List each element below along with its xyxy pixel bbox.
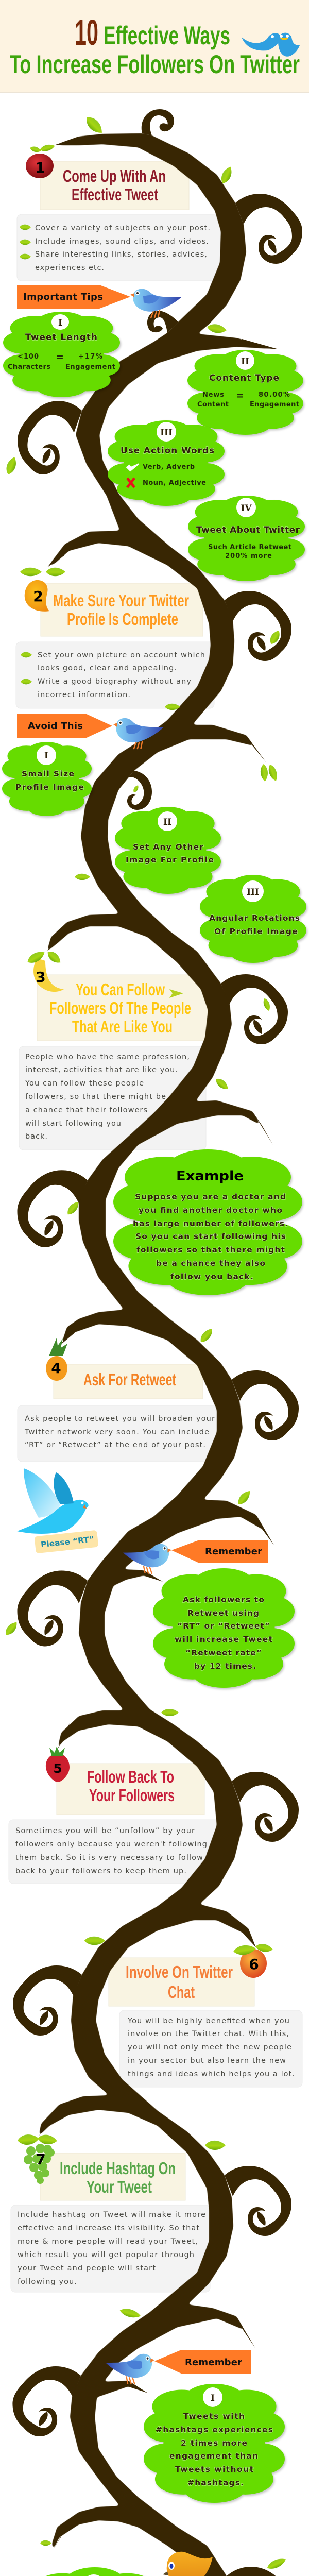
panel: step 1 text: Share interesting links, stories, advices,: [35, 250, 207, 259]
cloud: remember retweet: Ask followers to: [183, 1595, 264, 1604]
arrow: avoid this: Avoid This: [28, 721, 83, 732]
panel: step 3 heading box: Followers Of The People: [49, 998, 191, 1018]
icon: banana fruit 3: 3: [36, 969, 46, 986]
cloud: set any other image: Set Any Other: [133, 842, 203, 852]
cloud: angular rotations: Of Profile Image: [214, 927, 298, 936]
panel: step 5 text: Sometimes you will be “unfollow” by your: [15, 1827, 195, 1835]
cloud: remember retweet: “Retweet rate”: [185, 1648, 262, 1657]
panel: step 1 text: [17, 214, 223, 281]
arrow: important tips: Important Tips: [23, 292, 103, 302]
icon: apple fruit 1: 1: [35, 159, 45, 176]
cloud: remember retweet: “RT” or “Retweet”: [177, 1621, 270, 1631]
cloud: tweet length: +17%: [78, 353, 102, 361]
panel: step 6 text: in your sector but also learn the new: [128, 2057, 286, 2065]
icon: mango fruit 2: 2: [33, 588, 43, 605]
panel: step 3 text: followers, so that there might be: [25, 1093, 166, 1101]
cloud: small size profile image: Profile Image: [15, 783, 84, 792]
cloud: set any other image: [115, 807, 221, 894]
cloud: tweet about twitter: Such Article Retweet: [208, 544, 291, 551]
cloud: tweet about twitter: [188, 496, 305, 581]
icon: peach fruit 6: [233, 1943, 273, 1978]
cloud: example: Example: [176, 1168, 244, 1184]
panel: step 6 text: you will not only meet the new people: [128, 2043, 291, 2052]
panel: step 3 heading box: You Can Follow: [76, 980, 165, 999]
panel: step 3 text: People who have the same profession,: [25, 1053, 190, 1061]
arrow: avoid this: [17, 714, 112, 738]
cloud: tweet length: Engagement: [65, 363, 115, 371]
icon: peach fruit 6: 6: [249, 1956, 259, 1973]
cloud: content type: Engagement: [250, 401, 299, 409]
icon: grapes fruit 7: 7: [36, 2151, 46, 2168]
icon: mango fruit 2: [20, 568, 65, 612]
panel: step 7 heading box: [40, 2153, 185, 2200]
panel: step 5 heading box: Follow Back To: [87, 1767, 174, 1786]
cloud: small size profile image: I: [44, 751, 48, 761]
panel: step 3 text: You can follow these people: [25, 1079, 144, 1088]
panel: step 3 text: a chance that their followers: [25, 1106, 147, 1114]
cloud: hashtag engagement: engagement than: [169, 2451, 258, 2461]
icon: blue bird remember hashtag: [106, 2354, 154, 2384]
header banner: 10: [75, 12, 98, 53]
panel: step 1 heading box: Effective Tweet: [72, 185, 158, 204]
icon: orange bird on trunk: [163, 2552, 213, 2576]
panel: step 5 text: [9, 1820, 220, 1884]
panel: step 7 heading box: Your Tweet: [87, 2177, 152, 2196]
cloud: tweet about twitter: 200% more: [225, 552, 272, 560]
panel: step 7 heading box: Include Hashtag On: [60, 2159, 176, 2178]
cloud: use action words: Use Action Words: [121, 446, 214, 456]
panel: step 6 heading box: [109, 1958, 254, 2006]
cloud: tweet length: =: [56, 351, 64, 363]
cloud: set any other image: II: [163, 817, 171, 827]
cloud: example: be a chance they also: [156, 1259, 265, 1268]
panel: step 5 heading box: [57, 1764, 204, 1815]
cloud: tweet length: Characters: [8, 363, 50, 371]
panel: step 3 text: will start following you: [25, 1120, 121, 1128]
panel: step 6 text: You will be highly benefited when you: [127, 2017, 289, 2025]
cloud: example: So you can start following his: [135, 1232, 286, 1241]
cloud: angular rotations: Angular Rotations: [209, 913, 300, 923]
panel: step 7 text: your Tweet and people will start: [18, 2264, 156, 2273]
arrow: remember hashtag: Remember: [185, 2357, 242, 2368]
sign: please RT: [35, 1530, 98, 1553]
icon: strawberry fruit 5: 5: [53, 1761, 62, 1776]
panel: step 2 heading box: [41, 583, 203, 636]
panel: step 4 text: [18, 1405, 221, 1462]
panel: step 5 text: back to your followers to keep them up.: [15, 1867, 186, 1875]
cloud: example: you find another doctor who: [139, 1206, 282, 1215]
cloud: remember retweet: will increase Tweet: [175, 1635, 273, 1644]
cloud: content type: II: [241, 357, 249, 367]
cloud: example: Suppose you are a doctor and: [135, 1192, 286, 1201]
panel: step 2 text: [16, 642, 214, 708]
cloud: content type: 80.00%: [259, 391, 290, 399]
icon: banana fruit 3: [25, 948, 64, 992]
panel: step 5 heading box: Your Followers: [89, 1786, 175, 1805]
icon: grapes fruit 7: [17, 2133, 58, 2184]
cloud: hashtag engagement: #hashtags experiences: [156, 2425, 273, 2434]
cloud: example: follow you back.: [170, 1272, 253, 1281]
panel: step 3 text: back.: [25, 1132, 47, 1141]
panel: step 1 text: Cover a variety of subjects on your post.: [35, 224, 210, 232]
panel: step 3 text: [19, 1046, 206, 1150]
icon: flying pigeon: [17, 1468, 89, 1534]
cloud: content type: =: [236, 390, 244, 401]
cloud: hashtag engagement: #hashtags.: [187, 2478, 244, 2487]
panel: step 5 text: followers only because you weren't following: [15, 1840, 207, 1849]
panel: step 6 heading box: Involve On Twitter: [126, 1962, 233, 1981]
icon: blue bird remember retweet: [123, 1544, 171, 1574]
cloud: use action words: III: [160, 428, 173, 438]
panel: step 7 text: [11, 2205, 210, 2292]
cloud: remember retweet: by 12 times.: [194, 1662, 256, 1671]
cloud: hashtag engagement: Tweets with: [183, 2412, 245, 2421]
cloud: small size profile image: Small Size: [22, 769, 74, 778]
cloud: small size profile image: [2, 742, 92, 816]
cloud: set any other image: Image For Profile: [126, 855, 214, 865]
cloud: tweet about twitter: Tweet About Twitter: [196, 525, 300, 535]
panel: step 7 text: effective and increase its visibility. So that: [18, 2224, 199, 2232]
panel: step 7 text: following you.: [18, 2278, 77, 2286]
icon: pineapple fruit 4: [46, 1338, 67, 1381]
panel: step 7 text: more & more people will read your Tweet,: [18, 2238, 198, 2246]
cloud: hashtag limit: [24, 2567, 165, 2576]
panel: step 4 heading box: Ask For Retweet: [83, 1370, 176, 1389]
panel: step 7 text: Include hashtag on Tweet will make it more: [18, 2211, 205, 2219]
cloud: tweet length: [3, 312, 120, 397]
panel: step 2 text: Write a good biography without any: [38, 677, 191, 686]
icon: pineapple fruit 4: 4: [51, 1360, 61, 1377]
arrow: remember retweet: [171, 1540, 268, 1563]
panel: step 1 heading box: [40, 161, 189, 210]
cloud: example: followers so that there might: [136, 1245, 285, 1255]
icon: blue bird avoid this: [113, 718, 164, 749]
panel: step 4 text: “RT” or “Retweet” at the end of your post.: [25, 1441, 205, 1449]
cloud: content type: News: [202, 391, 224, 399]
cloud: hashtag engagement: Tweets without: [175, 2465, 254, 2474]
header banner: [0, 0, 309, 93]
panel: step 3 text: interest, activities that are like you.: [25, 1066, 178, 1074]
panel: step 6 heading box: Chat: [168, 1982, 195, 2002]
panel: step 4 text: Ask people to retweet you will broaden your: [25, 1415, 215, 1423]
cloud: hashtag engagement: I: [211, 2393, 215, 2403]
cloud: hashtag engagement: 2 times more: [181, 2438, 247, 2448]
cloud: tweet length: Tweet Length: [25, 332, 97, 343]
cloud: use action words: Verb, Adverb: [143, 463, 195, 471]
cloud: use action words: Noun, Adjective: [143, 479, 206, 487]
panel: step 3 heading box: [37, 975, 210, 1041]
panel: step 4 heading box: [54, 1364, 203, 1399]
panel: step 1 text: Include images, sound clips, and videos.: [35, 238, 209, 246]
sign: please RT: Please “RT”: [40, 1534, 95, 1549]
cloud: example: [113, 1149, 302, 1295]
cloud: hashtag engagement: [144, 2384, 285, 2503]
arrow: remember hashtag: [154, 2350, 251, 2374]
panel: step 1 heading box: Come Up With An: [63, 166, 166, 185]
panel: step 2 text: Set your own picture on account which: [38, 651, 205, 659]
panel: step 7 text: which result you will get popular through: [18, 2251, 194, 2259]
panel: step 2 heading box: Make Sure Your Twitter: [53, 591, 189, 610]
panel: step 5 text: them back. So it is very necessary to follow: [15, 1854, 203, 1862]
icon: apple fruit 1: [26, 143, 56, 178]
cloud: example: has large number of followers.: [133, 1219, 288, 1228]
icon: blue bird important tips: [130, 289, 181, 318]
arrow: remember retweet: Remember: [205, 1546, 262, 1557]
arrow: important tips: [17, 285, 130, 309]
panel: step 2 text: looks good, clear and appealing.: [38, 664, 177, 672]
cloud: tweet about twitter: IV: [241, 503, 252, 514]
panel: step 4 text: Twitter network very soon. You can include: [24, 1428, 209, 1436]
cloud: angular rotations: [200, 875, 306, 963]
cloud: remember retweet: [153, 1568, 295, 1688]
panel: step 2 heading box: Profile Is Complete: [67, 609, 178, 629]
icon: strawberry fruit 5: [46, 1747, 70, 1782]
cloud: content type: [187, 350, 303, 435]
panel: step 6 text: involve on the Twitter chat. With this,: [128, 2030, 289, 2038]
cloud: content type: Content: [197, 401, 229, 409]
panel: step 1 text: experiences etc.: [35, 264, 104, 272]
cloud: content type: Content Type: [209, 373, 279, 383]
cloud: tweet length: <100: [18, 353, 39, 361]
cloud: use action words: [108, 420, 225, 506]
panel: step 3 heading box: That Are Like You: [72, 1017, 173, 1036]
panel: step 2 text: incorrect information.: [38, 691, 130, 699]
cloud: angular rotations: III: [247, 887, 259, 897]
panel: step 6 text: [119, 2010, 302, 2087]
panel: step 6 text: things and ideas which helps you a lot.: [128, 2070, 295, 2078]
cloud: tweet length: I: [58, 318, 62, 328]
cloud: remember retweet: Retweet using: [187, 1608, 259, 1618]
header banner: Effective Ways: [104, 21, 230, 50]
